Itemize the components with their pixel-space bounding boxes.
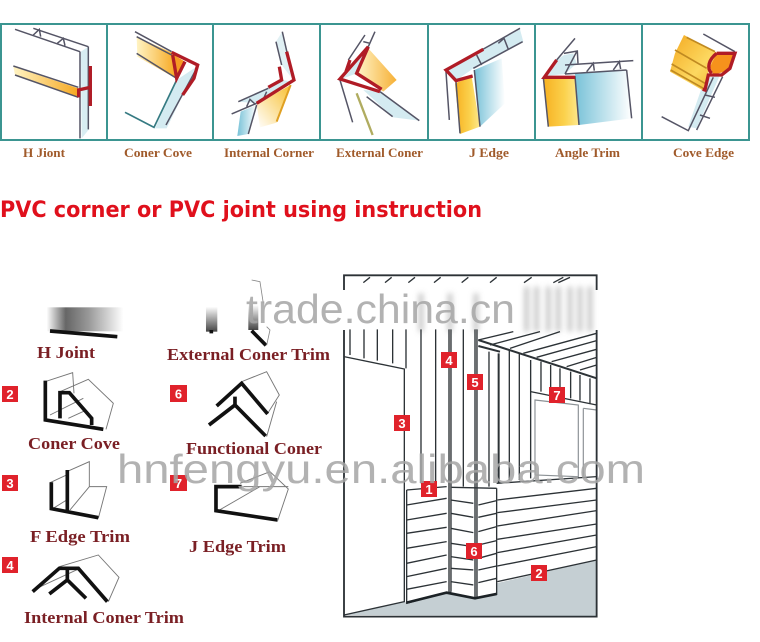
- top caption: External Coner: External Coner: [336, 146, 423, 160]
- left badge 6: [170, 385, 187, 402]
- icon: internal coner trim profile: [33, 555, 119, 602]
- caption: H Joint: H Joint: [37, 343, 95, 362]
- top caption: J Edge: J Edge: [469, 146, 509, 160]
- top edge ticks: [363, 277, 570, 283]
- caption: F Edge Trim: F Edge Trim: [30, 527, 130, 546]
- heading: PVC corner or PVC joint using instruction: [0, 198, 482, 223]
- top caption: Internal Corner: Internal Corner: [224, 146, 314, 160]
- icon: J edge trim profile: [216, 472, 288, 522]
- caption: Coner Cove: Coner Cove: [28, 434, 120, 453]
- left badge 2: [2, 386, 18, 402]
- diagram badge 6: 6: [470, 544, 478, 559]
- icon: internal corner: [232, 32, 294, 136]
- left badge 3: [2, 475, 18, 491]
- diagram badge 5: 5: [471, 375, 479, 390]
- blurred board streaks: [421, 287, 590, 332]
- icon: cove edge: [662, 34, 735, 131]
- diagram badge 1: [421, 481, 437, 497]
- icon: coner cove profile: [45, 373, 113, 429]
- lower left: black profile drawings: [33, 280, 288, 602]
- wainscot siding: [407, 477, 597, 603]
- diagram badge 4: [441, 352, 457, 368]
- ceiling: [478, 340, 597, 378]
- icon: functional coner profile: [209, 372, 279, 437]
- icon: J edge: [446, 28, 523, 134]
- icon: H joint: [13, 28, 90, 138]
- top caption: Angle Trim: Angle Trim: [555, 146, 621, 160]
- interior installation diagram: [344, 275, 597, 617]
- left badge 3: 3: [6, 476, 14, 491]
- caption: Internal Coner Trim: Internal Coner Trim: [24, 608, 184, 627]
- icon: external coner: [340, 32, 419, 135]
- corner trims: [445, 329, 455, 592]
- icon: coner cove: [125, 32, 198, 128]
- diagram badge 3: 3: [398, 416, 406, 431]
- diagram badge 7: [549, 387, 565, 403]
- outer frame: [344, 275, 597, 617]
- top caption: Coner Cove: Coner Cove: [124, 146, 192, 160]
- icon: external coner profile: [206, 280, 270, 345]
- diagram badge 5: [467, 374, 483, 390]
- upper wall boards: [350, 329, 590, 487]
- diagram badge 7: 7: [553, 388, 561, 403]
- window: [531, 392, 597, 405]
- watermark: hnfengyu.en.alibaba.com: hnfengyu.en.alibaba.com: [117, 446, 645, 492]
- diagram badge 4: 4: [445, 353, 453, 368]
- caption: Functional Coner: Functional Coner: [186, 439, 322, 458]
- left badge 2: 2: [6, 387, 14, 402]
- icon: angle trim: [543, 38, 633, 127]
- icon: F edge trim profile: [50, 462, 107, 518]
- diagram badge 2: [531, 565, 547, 581]
- caption: J Edge Trim: J Edge Trim: [189, 537, 286, 556]
- left badge 7: 7: [175, 476, 182, 491]
- caption: External Coner Trim: External Coner Trim: [167, 345, 330, 364]
- panel frame: [1, 24, 749, 140]
- diagram badge 1: 1: [425, 482, 433, 497]
- left badge 4: [2, 557, 18, 573]
- watermark: trade.china.cn: trade.china.cn: [246, 286, 515, 332]
- left badge 6: 6: [175, 386, 182, 402]
- top caption: H Jiont: H Jiont: [23, 146, 66, 160]
- top panel row: profile diagrams: [1, 24, 749, 140]
- diagram badge 6: [466, 543, 482, 559]
- diagram badge 2: 2: [535, 566, 543, 581]
- door: [344, 357, 404, 615]
- top caption: Cove Edge: Cove Edge: [673, 146, 734, 160]
- left badge 4: 4: [6, 558, 14, 573]
- floor: [345, 560, 597, 617]
- icon: H joint profile: [47, 307, 123, 337]
- left badge 7: [170, 475, 187, 491]
- diagram badge 3: [394, 415, 410, 431]
